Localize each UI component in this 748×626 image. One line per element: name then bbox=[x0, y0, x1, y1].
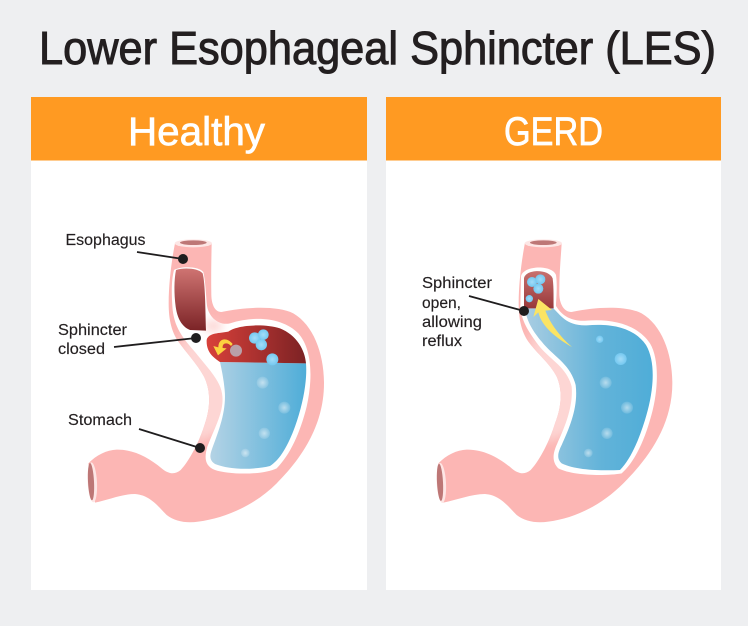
gastric air pocket bbox=[207, 325, 306, 363]
acid pool bbox=[210, 362, 306, 469]
bubbles bbox=[526, 274, 627, 365]
callout: Sphincter closed: closed bbox=[58, 341, 105, 358]
acid bubbles bbox=[584, 377, 633, 457]
panel header: Healthy: Healthy bbox=[128, 110, 265, 154]
white stomach lining bbox=[520, 268, 657, 475]
duodenum opening bbox=[87, 462, 98, 503]
white stomach lumen bbox=[172, 267, 310, 474]
acid column bbox=[525, 308, 653, 470]
esophagus closed section bbox=[174, 268, 206, 331]
callout: Sphincter closed bbox=[58, 322, 201, 358]
esophagus opening bbox=[525, 239, 562, 247]
title: Lower Esophageal Sphincter (LES) bbox=[39, 22, 716, 74]
callout: Sphincter closed: Sphincter bbox=[58, 322, 127, 339]
pale inner curve bbox=[528, 336, 572, 443]
esophagus opening bbox=[175, 239, 212, 247]
callout: Stomach: Stomach bbox=[68, 412, 132, 429]
callout: Esophagus: Esophagus bbox=[66, 232, 146, 249]
yellow reflux arrow bbox=[533, 299, 572, 347]
yellow reflux arrow bbox=[213, 339, 233, 355]
pale inner curve bbox=[178, 336, 222, 443]
callout: Sphincter open, allowing reflux bbox=[422, 275, 529, 350]
callout: Sphincter open, allowing reflux: allowing bbox=[422, 314, 482, 331]
panel: GERD bbox=[386, 97, 721, 590]
panel: Healthy bbox=[31, 97, 367, 590]
refluxed section bbox=[524, 271, 554, 308]
duodenum opening bbox=[436, 463, 447, 503]
callout: Sphincter open, allowing reflux: Sphincter bbox=[422, 275, 492, 292]
panel header: GERD: GERD bbox=[504, 110, 603, 154]
callout: Sphincter open, allowing reflux: reflux bbox=[422, 333, 462, 350]
blocked bubble bbox=[230, 345, 242, 357]
acid bubbles bbox=[241, 377, 290, 457]
diagram: GERD stomach bbox=[436, 239, 672, 522]
diagram: healthy stomach bbox=[87, 239, 324, 522]
bubbles bbox=[249, 329, 278, 365]
stomach wall bbox=[88, 243, 324, 522]
callout: Esophagus bbox=[66, 232, 188, 264]
panel header: GERD bbox=[386, 97, 721, 160]
stomach wall bbox=[438, 243, 672, 522]
pale sphincter glow bbox=[204, 320, 223, 332]
panel header: Healthy bbox=[31, 97, 367, 160]
callout: Stomach bbox=[68, 412, 205, 453]
callout: Sphincter open, allowing reflux: open, bbox=[422, 295, 461, 312]
